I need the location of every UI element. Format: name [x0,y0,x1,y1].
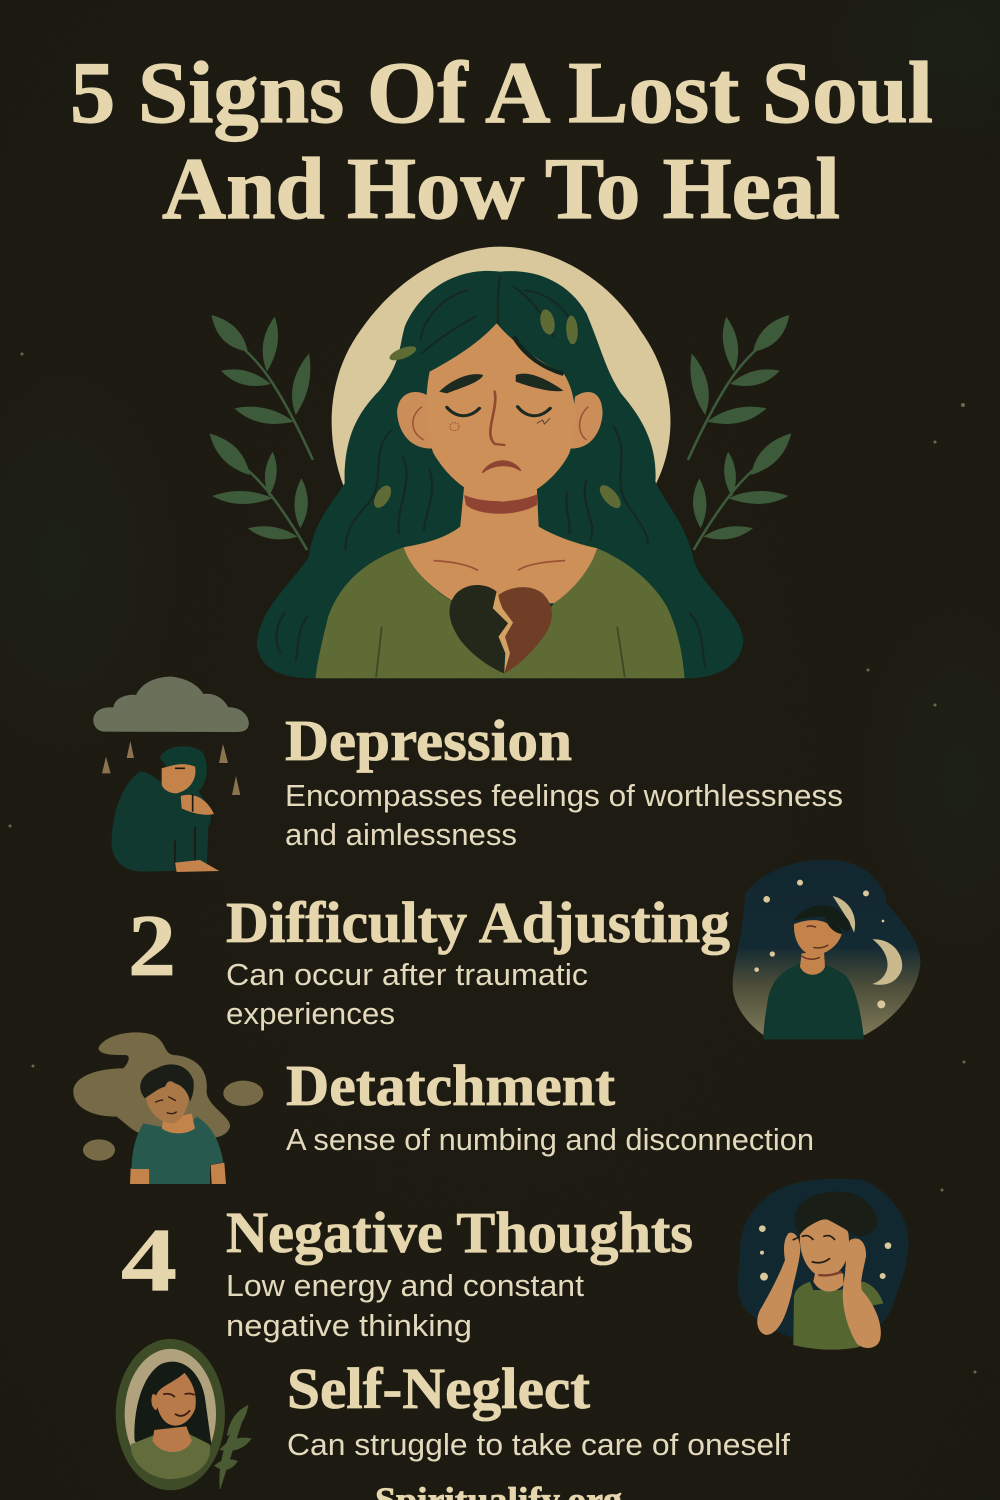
title: And How To Heal [162,141,840,238]
description: Can struggle to take care of oneself [287,1427,790,1462]
heading: Negative Thoughts [226,1200,693,1265]
outer frame [116,1339,225,1490]
brows, eyes, nose and mouth [434,337,564,570]
item 5: Self-Neglect [116,1339,790,1490]
description: negative thinking [226,1308,472,1343]
moons [833,896,902,985]
arms and hands [757,1233,881,1348]
heading: Self-Neglect [287,1356,591,1421]
icon: person holding head [738,1179,908,1350]
description: and aimlessness [285,817,517,852]
figure [763,963,864,1039]
sparkles [759,1225,891,1281]
title [70,45,933,238]
neck and chest [404,487,597,603]
icon: person in fog cloud [73,1032,263,1184]
rain drops [102,741,240,795]
item 2: Difficulty Adjusting [128,860,920,1039]
heading: Difficulty Adjusting [226,890,730,955]
hair strands [277,277,705,667]
item 1: Depression [93,677,843,872]
neck [813,1273,843,1292]
icon: woman in oval frame [116,1339,251,1490]
head [800,1220,849,1278]
neck [162,1113,195,1133]
heading: Depression [285,708,572,773]
leaves behind figure [210,315,791,550]
stars [754,880,885,1008]
sprig [215,1406,251,1489]
neck shadow [464,494,538,514]
figure [131,1434,210,1479]
item 4: Negative Thoughts [121,1179,908,1350]
night sky blob [733,860,920,1035]
hair [795,1191,877,1236]
blue background blob [738,1179,908,1343]
heading: Detatchment [286,1053,616,1118]
hair leaves [370,308,625,511]
rain cloud [93,677,249,732]
description: A sense of numbing and disconnection [286,1122,814,1157]
title: 5 Signs Of A Lost Soul [70,45,933,142]
ears [397,392,603,448]
shirt [793,1282,883,1350]
number 2: 2 [128,898,176,995]
sweater [316,547,684,678]
t-shirt [132,1117,223,1184]
broken heart [449,585,552,673]
description [226,1268,584,1343]
inner frame [125,1349,216,1479]
description: experiences [226,996,395,1031]
arms [130,1163,226,1184]
halo [332,247,670,486]
icon: person under rain cloud [93,677,249,872]
hunched figure [112,772,211,872]
description: Encompasses feelings of worthlessness [285,778,843,813]
number 4: 4 [121,1211,177,1310]
icon: person under night sky [733,860,920,1039]
face [426,323,575,502]
description [285,778,843,852]
description: Can occur after traumatic [226,957,588,992]
main illustration: sad woman with broken heart [210,247,791,678]
item 3: Detatchment [73,1032,814,1184]
hair [140,1064,194,1102]
description: Low energy and constant [226,1268,584,1303]
hair [257,271,743,678]
head [145,1081,189,1123]
hair [134,1362,211,1466]
fog cloud [73,1032,230,1140]
description [226,957,588,1031]
